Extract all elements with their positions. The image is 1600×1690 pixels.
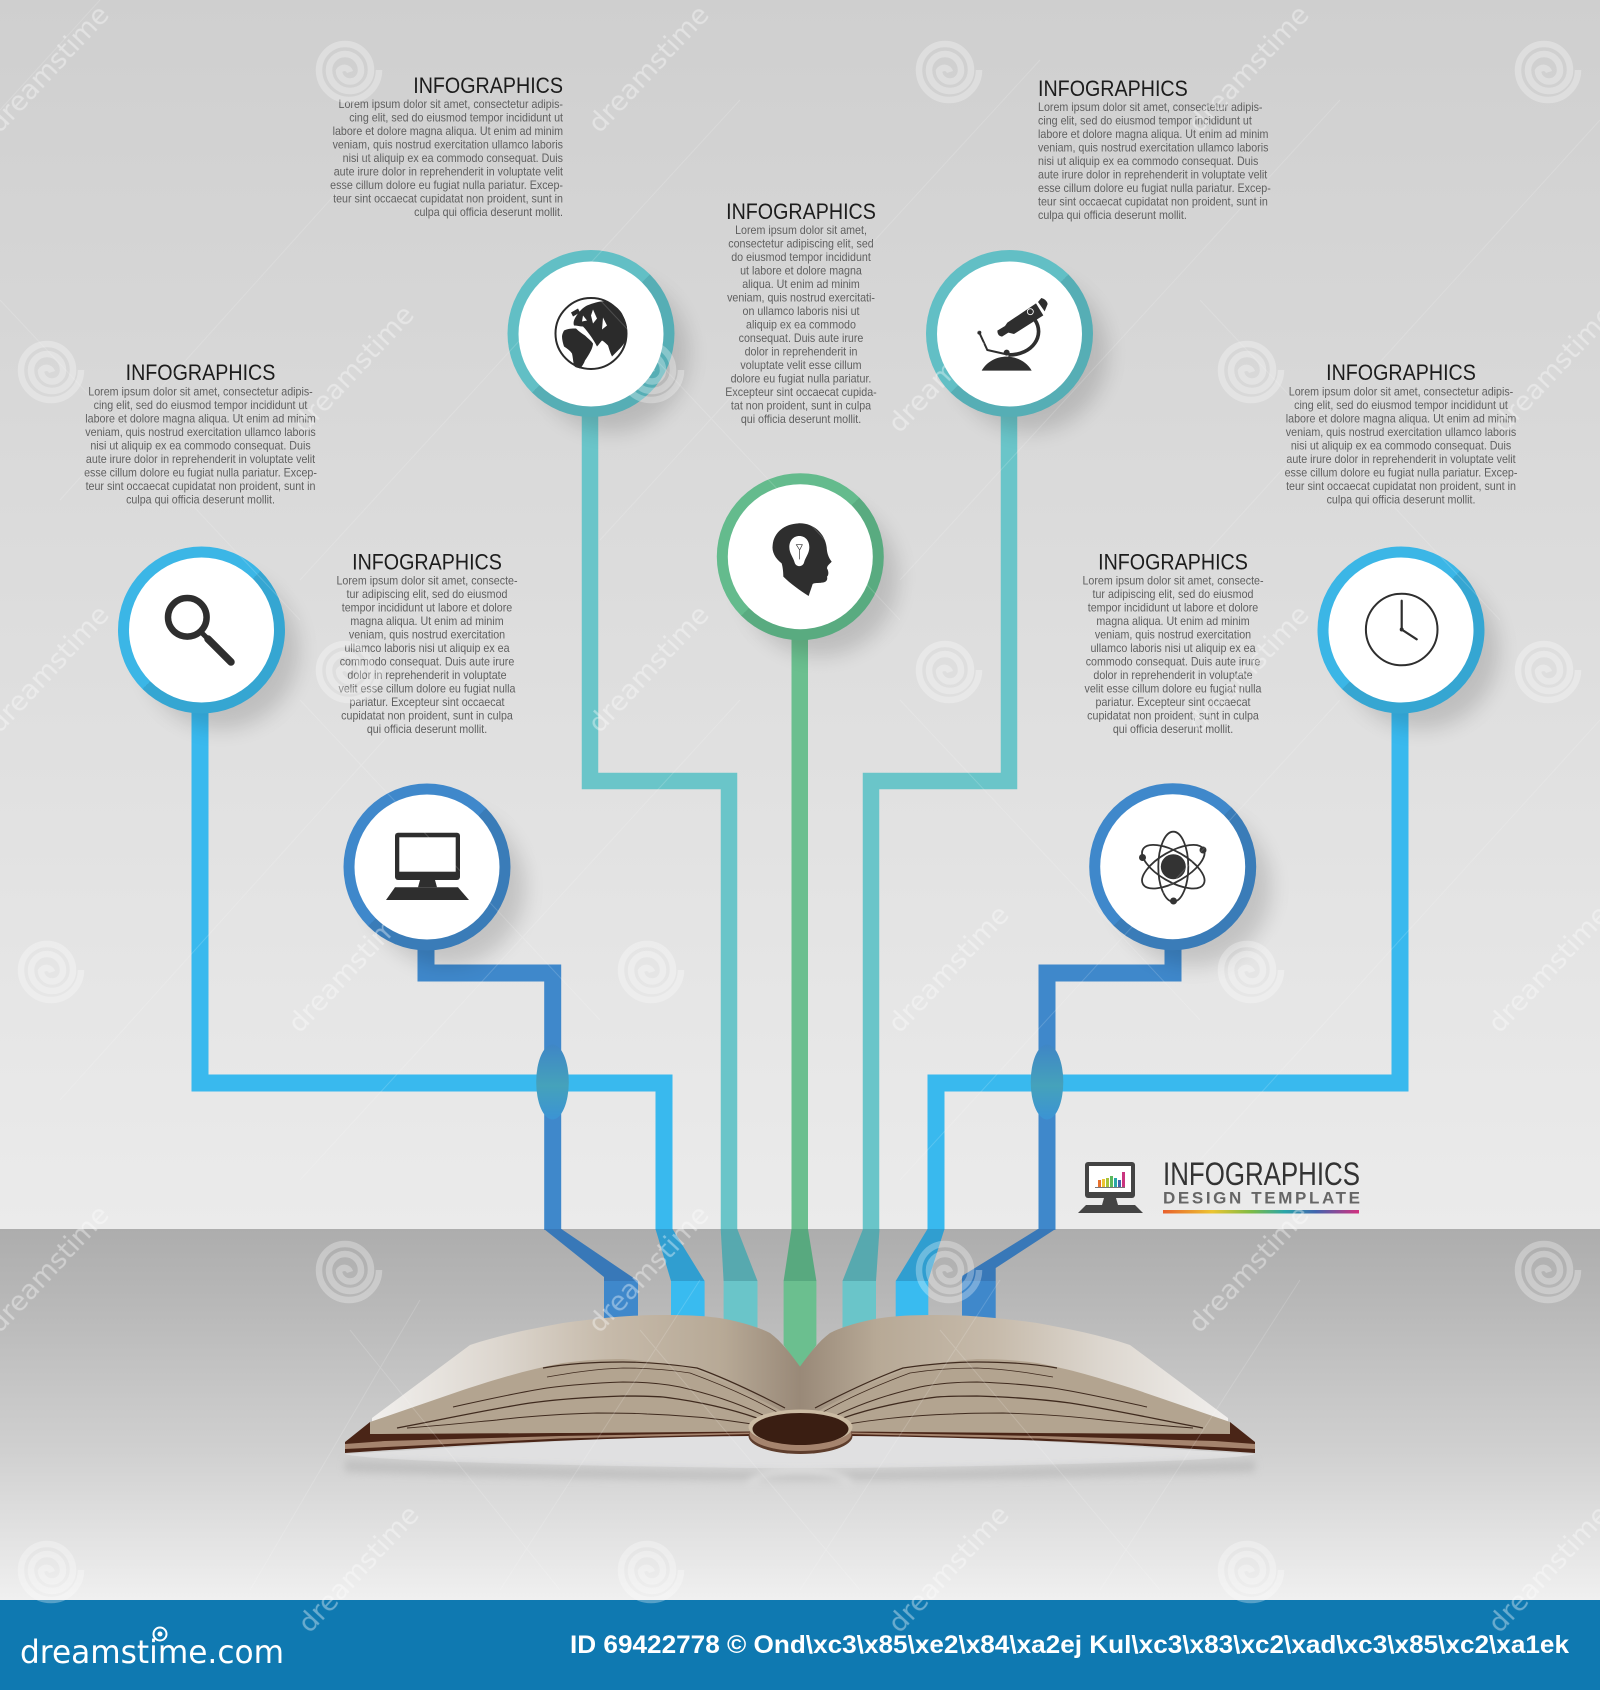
node: idea head — [717, 473, 898, 656]
body text: tur adipiscing elit, sed do eiusmod — [347, 589, 507, 601]
body text: Lorem ipsum dolor sit amet, consectetur adipis- — [339, 99, 563, 111]
body text: qui officia deserunt mollit. — [741, 414, 861, 426]
connector: microscope line (teal, right) — [842, 400, 1009, 1331]
body text: dolor in reprehenderit in voluptate — [347, 670, 507, 682]
watermark overlay: dreamstime — [582, 1199, 715, 1339]
background: floor — [0, 1229, 1600, 1600]
node: atom — [1089, 783, 1271, 966]
body text: dolor in reprehenderit in — [745, 346, 857, 359]
body text: esse cillum dolore eu fugiat nulla pariatur. Excep- — [84, 467, 317, 480]
body text: veniam, quis nostrud exercitation ullamco laboris — [1286, 427, 1517, 439]
body text: veniam, quis nostrud exercitation ullamco laboris — [333, 139, 563, 152]
connector: clock line (sky blue, right) — [896, 690, 1400, 1321]
node: microscope — [926, 250, 1108, 432]
connector junction: left oval — [536, 1044, 569, 1120]
body text: cing elit, sed do eiusmod tempor incididunt ut — [1294, 400, 1508, 412]
text block: lower left — [336, 550, 518, 736]
body text: dolore eu fugiat nulla pariatur. — [731, 373, 871, 386]
watermark overlay: dreamstime — [1182, 0, 1315, 139]
body text: labore et dolore magna aliqua. Ut enim ad minim — [85, 413, 316, 426]
watermark overlay: dreamstime — [1182, 1199, 1315, 1339]
book reflection — [345, 1434, 1255, 1484]
body text: tempor incididunt ut labore et dolore — [1088, 602, 1258, 615]
icon: monitor with bar chart — [1078, 1162, 1143, 1213]
footer logo: dreamstime.com — [20, 1633, 284, 1671]
body text — [1285, 386, 1518, 507]
watermark overlay: dreamstime — [582, 0, 715, 139]
body text: Lorem ipsum dolor sit amet, consectetur adipis- — [1038, 102, 1263, 114]
body text: qui officia deserunt mollit. — [1113, 724, 1233, 736]
body text — [84, 386, 317, 507]
body text: culpa qui officia deserunt mollit. — [126, 494, 275, 507]
icon: microscope — [977, 298, 1048, 371]
watermark overlay: dreamstime — [1182, 599, 1315, 739]
watermark overlay: dreamstime — [882, 1499, 1015, 1639]
connector: search line (sky blue, left) — [200, 690, 705, 1321]
background: wall — [0, 0, 1600, 1229]
body text: aliquip ex ea commodo — [746, 319, 856, 332]
body text: nisi ut aliquip ex ea commodo consequat. Duis — [1291, 440, 1512, 453]
watermark overlay: dreamstime — [882, 299, 1015, 439]
body text: nisi ut aliquip ex ea commodo consequat. Duis — [1038, 156, 1259, 168]
body text: esse cillum dolore eu fugiat nulla pariatur. Excep- — [330, 180, 563, 192]
body text: Excepteur sint occaecat cupida- — [725, 387, 877, 399]
body text: teur sint occaecat cupidatat non proident, sunt in — [86, 481, 315, 493]
body text: cupidatat non proident, sunt in culpa — [341, 710, 514, 723]
body text — [330, 99, 563, 219]
connector junction: right oval — [1031, 1044, 1063, 1120]
body text: aute irure dolor in reprehenderit in voluptate velit — [1286, 454, 1516, 466]
body text: labore et dolore magna aliqua. Ut enim ad minim — [333, 126, 563, 138]
body text: dolor in reprehenderit in voluptate — [1093, 670, 1253, 682]
body text: esse cillum dolore eu fugiat nulla pariatur. Excep- — [1285, 467, 1518, 480]
watermark overlay: dreamstime — [282, 899, 415, 1039]
body text — [1082, 575, 1264, 736]
body text: labore et dolore magna aliqua. Ut enim ad minim — [1286, 413, 1516, 426]
body text: aute irure dolor in reprehenderit in voluptate velit — [1038, 169, 1267, 182]
body text: qui officia deserunt mollit. — [367, 724, 487, 736]
connector: head line (green, centre) — [784, 620, 816, 1368]
body text: culpa qui officia deserunt mollit. — [1038, 210, 1187, 222]
icon: clock — [1366, 594, 1437, 665]
body text: teur sint occaecat cupidatat non proident, sunt in — [1038, 196, 1268, 209]
body text: pariatur. Excepteur sint occaecat — [1095, 697, 1251, 709]
body text: cing elit, sed do eiusmod tempor incididunt ut — [349, 112, 563, 125]
body text: ut labore et dolore magna — [740, 265, 863, 278]
watermark overlay: dreamstime — [582, 599, 715, 739]
body text — [336, 575, 518, 736]
logo: infographics design template — [1078, 1156, 1360, 1214]
connector: computer line (blue, left) — [426, 900, 638, 1321]
right half of book — [799, 1315, 1255, 1453]
footer credit: ID 69422778 © Ond\xc3\x85\xe2\x84\xa2ej Kul\xc3\x83\xc2\xad\xc3\x85\xc2\xa1ek — [570, 1631, 1569, 1659]
text block: top left — [330, 74, 563, 219]
text block: centre — [725, 200, 877, 426]
body text: culpa qui officia deserunt mollit. — [1327, 494, 1475, 507]
body text: commodo consequat. Duis aute irure — [340, 656, 514, 669]
body text: cupidatat non proident, sunt in culpa — [1087, 710, 1260, 723]
body text: teur sint occaecat cupidatat non proident, sunt in — [1286, 481, 1516, 493]
body text: veniam, quis nostrud exercitation — [1095, 629, 1251, 642]
icon: head with lightbulb — [772, 523, 832, 596]
footer bar — [0, 1600, 1600, 1690]
body text: pariatur. Excepteur sint occaecat — [349, 697, 505, 709]
body text: aute irure dolor in reprehenderit in voluptate velit — [86, 454, 315, 466]
body text: Lorem ipsum dolor sit amet, consecte- — [1082, 575, 1264, 588]
heading: INFOGRAPHICS — [726, 200, 876, 224]
body text: teur sint occaecat cupidatat non proident, sunt in — [333, 193, 563, 206]
body text: nisi ut aliquip ex ea commodo consequat. Duis — [90, 440, 311, 453]
body text: magna aliqua. Ut enim ad minim — [350, 616, 504, 628]
node: globe — [508, 250, 689, 432]
watermark overlay: dreamstime — [287, 299, 420, 439]
text block: lower right — [1082, 550, 1264, 736]
node: search — [118, 546, 299, 729]
body text: Lorem ipsum dolor sit amet, — [735, 225, 867, 237]
body text: commodo consequat. Duis aute irure — [1086, 656, 1260, 669]
body text: cing elit, sed do eiusmod tempor incididunt ut — [1038, 115, 1252, 128]
connector: atom line (blue, right) — [962, 900, 1173, 1321]
book — [345, 1315, 1255, 1484]
heading: INFOGRAPHICS — [126, 361, 275, 385]
body text: veniam, quis nostrud exercitati- — [727, 292, 875, 305]
heading: INFOGRAPHICS — [1326, 361, 1476, 385]
body text: tempor incididunt ut labore et dolore — [342, 602, 512, 615]
body text: cing elit, sed do eiusmod tempor incididunt ut — [94, 400, 307, 412]
body text: aute irure dolor in reprehenderit in voluptate velit — [334, 166, 563, 179]
logo title: INFOGRAPHICS — [1163, 1156, 1360, 1192]
body text: consequat. Duis aute irure — [739, 333, 863, 345]
body text: on ullamco laboris nisi ut — [742, 306, 860, 318]
rainbow bar — [1163, 1210, 1359, 1214]
body text: aliqua. Ut enim ad minim — [742, 279, 860, 291]
text block: far left — [84, 361, 317, 507]
icon: globe — [556, 298, 627, 369]
heading: INFOGRAPHICS — [352, 550, 502, 575]
body text — [1038, 102, 1271, 222]
connector: globe line (teal, left) — [590, 400, 758, 1331]
body text: consectetur adipiscing elit, sed — [728, 238, 874, 251]
body text: labore et dolore magna aliqua. Ut enim ad minim — [1038, 129, 1268, 141]
body text: culpa qui officia deserunt mollit. — [414, 207, 563, 219]
body text: nisi ut aliquip ex ea commodo consequat. Duis — [343, 153, 563, 165]
node: clock — [1318, 546, 1499, 729]
heading: INFOGRAPHICS — [413, 74, 563, 98]
body text: ullamco laboris nisi ut aliquip ex ea — [344, 643, 510, 655]
watermark overlay: dreamstime — [292, 1499, 425, 1639]
body text: velit esse cillum dolore eu fugiat nulla — [339, 683, 516, 696]
body text: Lorem ipsum dolor sit amet, consecte- — [336, 575, 518, 588]
body text: Lorem ipsum dolor sit amet, consectetur adipis- — [1289, 386, 1514, 399]
body text: magna aliqua. Ut enim ad minim — [1096, 616, 1250, 628]
icon: atom — [1135, 832, 1211, 904]
left half of book — [345, 1315, 801, 1453]
body text: esse cillum dolore eu fugiat nulla pariatur. Excep- — [1038, 183, 1271, 195]
icon: computer — [386, 833, 469, 900]
node: computer — [344, 784, 525, 966]
logo subtitle: DESIGN TEMPLATE — [1163, 1188, 1360, 1208]
body text: tat non proident, sunt in culpa — [731, 400, 872, 413]
watermark overlay: dreamstime — [882, 899, 1015, 1039]
body text: veniam, quis nostrud exercitation — [349, 629, 505, 642]
body text: Lorem ipsum dolor sit amet, consectetur adipis- — [88, 386, 313, 399]
body text: ullamco laboris nisi ut aliquip ex ea — [1090, 643, 1256, 655]
heading: INFOGRAPHICS — [1038, 77, 1188, 101]
body text: veniam, quis nostrud exercitation ullamco laboris — [85, 427, 316, 439]
book spine — [748, 1410, 852, 1454]
body text: velit esse cillum dolore eu fugiat nulla — [1085, 683, 1262, 696]
icon: magnifying glass — [168, 598, 231, 662]
body text: voluptate velit esse cillum — [740, 360, 862, 372]
heading: INFOGRAPHICS — [1098, 550, 1248, 575]
body text — [725, 225, 877, 426]
body text: do eiusmod tempor incididunt — [731, 252, 871, 264]
text block: far right — [1285, 361, 1518, 507]
text block: top right — [1038, 77, 1271, 222]
body text: tur adipiscing elit, sed do eiusmod — [1093, 589, 1253, 601]
body text: veniam, quis nostrud exercitation ullamco laboris — [1038, 142, 1269, 155]
